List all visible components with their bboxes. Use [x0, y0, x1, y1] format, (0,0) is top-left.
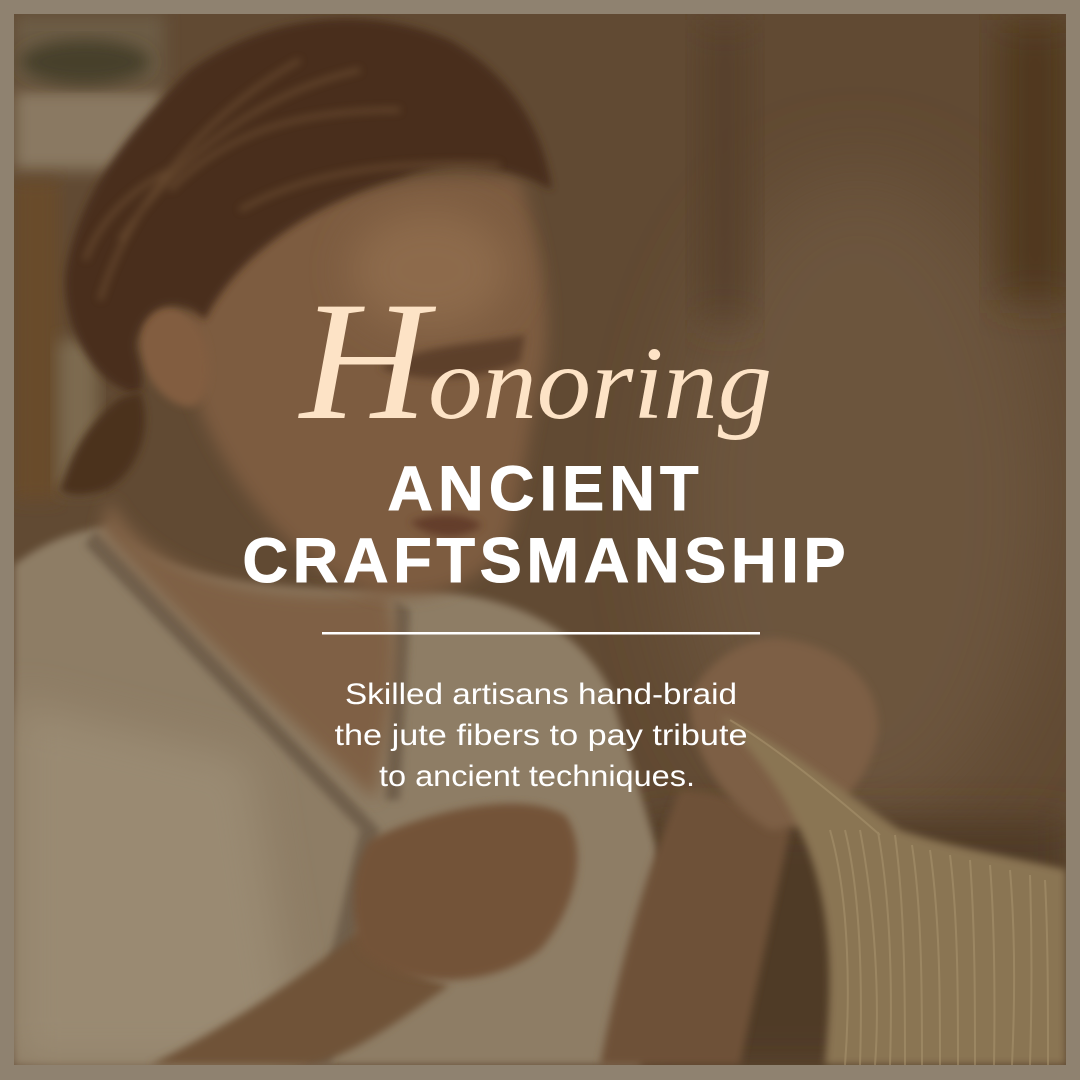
braid bun: [60, 392, 145, 495]
neck: [100, 500, 396, 800]
eye and lip shadows: [380, 335, 525, 536]
right hand: [690, 638, 878, 830]
fiber texture: [730, 720, 1048, 1065]
right forearm: [600, 790, 790, 1065]
heading: CRAFTSMANSHIP: CRAFTSMANSHIP: [242, 526, 846, 596]
hair: [65, 19, 552, 392]
heading: ANCIENT: ANCIENT: [388, 454, 698, 524]
jute fibers: [720, 715, 1066, 1065]
left forearm: [150, 930, 450, 1065]
shirt: [14, 525, 660, 1065]
face: [190, 175, 547, 596]
forehead highlight: [350, 210, 510, 330]
left hand: [353, 804, 577, 980]
body text: Skilled artisans hand-braid: [345, 678, 737, 711]
shirt light area: [14, 700, 300, 1065]
divider rule: [322, 632, 760, 634]
hair highlights: [85, 60, 500, 300]
heading: script Honoring: Honoring: [298, 267, 772, 455]
body text: [334, 678, 748, 793]
body text: to ancient techniques.: [379, 760, 695, 793]
body text: the jute fibers to pay tribute: [334, 719, 748, 752]
ear: [139, 306, 209, 407]
shirt shading: [85, 530, 410, 1065]
